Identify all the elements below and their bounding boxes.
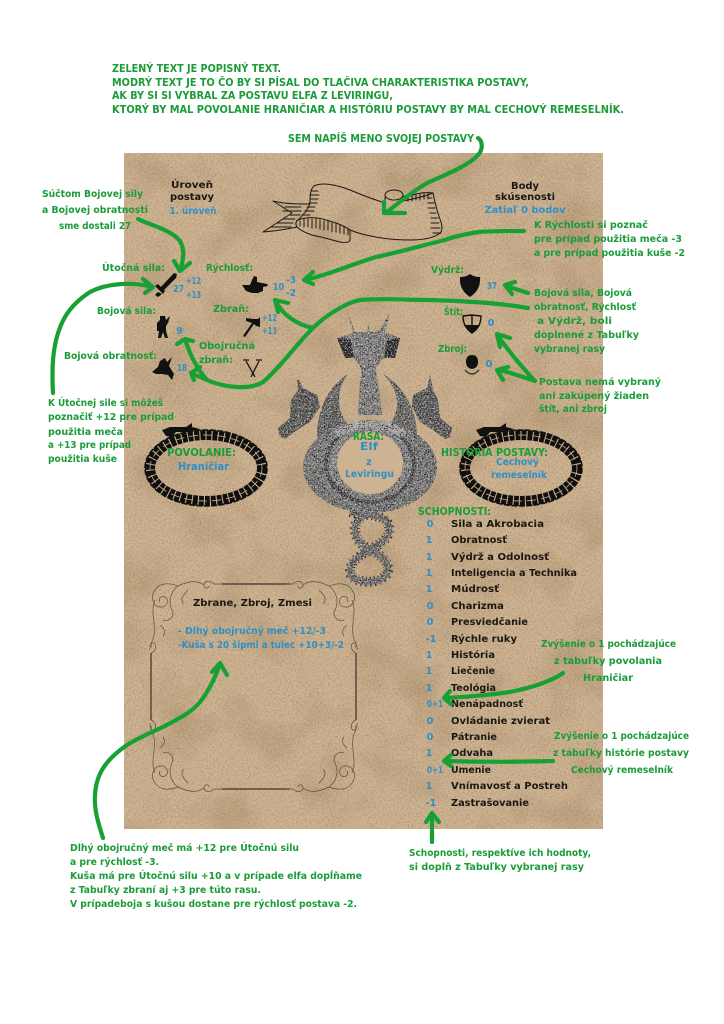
dragon body ring — [303, 421, 437, 513]
callout: ranger bonus: Zvýšenie o 1 pochádzajúce — [541, 638, 676, 650]
callout: weapon explanation — [70, 841, 362, 910]
callout: guild craftsman bonus: z tabuľky histórie postavy — [553, 747, 690, 759]
ability values: 1 — [426, 584, 433, 595]
ability names: História — [451, 649, 495, 661]
ability values: 1 — [426, 748, 433, 759]
callout: weapon explanation: Kuša má pre Útočnú silu +10 a v prípade elfa dopĺňame — [70, 869, 362, 882]
callout: no shield or armor — [539, 376, 662, 415]
ability names: Múdrosť — [451, 583, 499, 595]
equipment list — [178, 625, 344, 651]
ability values: 0 — [427, 601, 434, 612]
arrow: speed note to speed — [304, 231, 524, 284]
intro text: KTORÝ BY MAL POVOLANIE HRANIČIAR A HISTÓRIU POSTAVY BY MAL CECHOVÝ REMESELNÍK. — [112, 103, 624, 116]
ability values: 1 — [426, 535, 433, 546]
dragon centre head — [337, 312, 400, 415]
callout: speed note: K Rýchlosti si poznač — [534, 219, 648, 231]
stat: weapon: Zbraň: — [213, 303, 249, 315]
ability names: Umenie — [451, 765, 491, 776]
heading: experience points: skúsenosti — [495, 191, 555, 203]
arrow: weapon explanation to equipment — [95, 663, 227, 838]
stat: weapon — [213, 303, 277, 337]
stat: shield — [444, 305, 495, 333]
stat: endurance — [431, 264, 497, 297]
stat: armor: 0 — [486, 359, 493, 370]
callout: abilities from race table: Schopnosti, respektíve ich hodnoty, — [409, 847, 591, 859]
callout: no shield or armor: ani zakúpený žiaden — [539, 390, 649, 402]
stat: combat strength — [97, 305, 183, 338]
callout: speed note: pre prípad použitia meča -3 — [534, 233, 682, 245]
heading: level: postavy — [170, 192, 215, 203]
panel: weapons, armor, equipment frame — [150, 581, 357, 792]
ability values: 0 — [427, 732, 434, 743]
callout: weapon explanation: z Tabuľky zbraní aj +3 pre túto rasu. — [70, 884, 261, 896]
stat: endurance: 37 — [487, 281, 497, 292]
arrow: sum to attack power — [138, 219, 190, 271]
heading: level — [170, 178, 217, 217]
stat: speed: 10 — [273, 282, 284, 293]
ability names: Obratnosť — [451, 534, 507, 546]
dragon left head — [278, 377, 320, 439]
arrow: ranger bonus — [444, 673, 563, 704]
equipment list: -Kuša s 20 šípmi a tulec +10+3/-2 — [178, 639, 344, 651]
stat: two-handed weapon: Obojručná — [199, 340, 255, 352]
arrow: name to banner — [384, 138, 482, 213]
callout: abilities from race table: si doplň z Tabuľky vybranej rasy — [409, 861, 585, 873]
stat: combat agility — [64, 350, 187, 380]
icon: three-headed dragon — [278, 312, 452, 582]
ability values: 1 — [426, 650, 433, 661]
ability names: Inteligencia a Technika — [451, 568, 577, 579]
ability names: Pátranie — [451, 731, 497, 743]
ability values: 1 — [426, 568, 433, 579]
stat: speed: -2 — [286, 288, 296, 299]
panel: parchment character sheet — [124, 153, 603, 829]
callout: sum of combat stats: a Bojovej obratnosti — [42, 205, 148, 216]
stat: combat agility: Bojová obratnosť: — [64, 350, 157, 362]
callout: speed note — [534, 219, 685, 259]
callout: race stats note — [534, 287, 640, 355]
panel: character history: remeselník — [491, 469, 547, 481]
ability values: 0+1 — [427, 765, 443, 776]
ability names: Liečenie — [451, 665, 495, 677]
panel: profession — [167, 446, 236, 473]
stat: attack power: Útočná sila: — [102, 261, 165, 274]
stat: two-handed weapon: zbraň: — [199, 354, 233, 366]
panel: abilities list — [418, 505, 577, 809]
ability names: Vnímavosť a Postreh — [451, 780, 568, 792]
callout: guild craftsman bonus — [553, 730, 690, 776]
dragon ring opening — [337, 432, 403, 494]
ability names: Zastrašovanie — [451, 797, 529, 809]
callout: ranger bonus: z tabuľky povolania — [554, 656, 662, 667]
stat: speed: -3 — [286, 275, 296, 286]
callout: guild craftsman bonus: Cechový remeselník — [571, 764, 673, 776]
stat: shield: Štít: — [444, 305, 463, 318]
stat: combat strength: 9 — [176, 326, 183, 337]
ability names: Teológia — [451, 682, 496, 694]
arrow: race stats branching to stats — [177, 299, 528, 387]
panel: profession: POVOLANIE: — [167, 446, 236, 459]
panel: race: Leviringu — [345, 469, 394, 480]
ability values: 1 — [426, 781, 433, 792]
panel: race: RASA: — [353, 430, 384, 443]
callout: race stats note: doplnené z Tabuľky — [534, 329, 640, 341]
stat: attack power: 27 — [173, 284, 184, 295]
panel: race: Elf — [360, 440, 378, 453]
callout: race stats note: a Výdrž, boli — [537, 315, 612, 327]
stat: combat strength: Bojová sila: — [97, 305, 156, 317]
ability values: 1 — [426, 666, 433, 677]
callout: attack power note: K Útočnej sile si môžeš — [48, 396, 163, 409]
ability names: Presviedčanie — [451, 616, 528, 628]
callout: weapon explanation: a pre rýchlosť -3. — [70, 856, 159, 868]
callout: ranger bonus — [541, 638, 676, 684]
callout: no shield or armor: štít, ani zbroj — [539, 403, 607, 415]
stat: speed — [206, 262, 296, 299]
callout: race stats note: Bojová sila, Bojová — [534, 287, 632, 299]
ornamental frame — [150, 581, 357, 792]
ability values: 0+1 — [427, 699, 443, 710]
arrow: to shield and armor values — [497, 334, 535, 381]
ability names: Výdrž a Odolnosť — [451, 551, 549, 563]
ability values — [426, 519, 443, 809]
panel: character history: Cechový — [496, 456, 540, 468]
intro text: AK BY SI SI VYBRAL ZA POSTAVU ELFA Z LEVIRINGU, — [112, 89, 393, 102]
arrow: attack note to attack power — [52, 279, 153, 393]
arrow: guild craftsman bonus — [444, 755, 553, 766]
callout: speed note: a pre prípad použitia kuše -2 — [534, 247, 685, 259]
ability values: -1 — [426, 798, 437, 809]
stat: weapon: +12 — [262, 313, 277, 324]
heading: experience points — [484, 181, 566, 216]
ability names — [451, 519, 577, 809]
stat: shield: 0 — [488, 318, 495, 329]
panel: character history — [441, 446, 548, 481]
intro text: MODRÝ TEXT JE TO ČO BY SI PÍSAL DO TLAČIVA CHARAKTERISTIKA POSTAVY, — [112, 76, 529, 89]
stat: attack power: +12 — [186, 276, 201, 287]
callout: attack power note: použitia kuše — [48, 453, 117, 465]
stat: armor: Zbroj: — [438, 344, 467, 355]
panel: race: z — [366, 457, 372, 468]
callout: attack power note: a +13 pre prípad — [48, 439, 131, 451]
dragon wings — [317, 374, 417, 437]
stat: attack power — [102, 261, 201, 301]
callout: abilities from race table — [409, 847, 591, 873]
stat: weapon: +13 — [262, 326, 277, 337]
stat: endurance: Výdrž: — [431, 264, 464, 276]
callout: attack power note: poznačiť +12 pre prípad — [48, 411, 174, 423]
icon: left ouroboros — [145, 423, 267, 506]
ability values: 1 — [426, 683, 433, 694]
ability names: Ovládanie zvierat — [451, 715, 550, 727]
stat: attack power: +13 — [186, 290, 201, 301]
icon: right ouroboros — [460, 423, 582, 506]
panel: profession: Hraničiar — [178, 460, 230, 473]
callout: ranger bonus: Hraničiar — [583, 672, 633, 684]
callout: race stats note: obratnosť, Rýchlosť — [534, 301, 636, 313]
callout: sum of combat stats: sme dostali 27 — [59, 221, 131, 232]
intro text — [112, 62, 624, 116]
dragon right head — [412, 375, 452, 439]
heading: experience points: Zatiaľ 0 bodov — [484, 205, 566, 216]
callout: sum of combat stats — [42, 188, 148, 232]
arrow: to endurance — [505, 282, 528, 294]
callout: guild craftsman bonus: Zvýšenie o 1 pochádzajúce — [554, 730, 689, 742]
callout: weapon explanation: Dlhý obojručný meč má +12 pre Útočnú silu — [70, 841, 299, 854]
ability names: Nenápadnosť — [451, 698, 523, 710]
stat: combat agility: 18 — [177, 363, 187, 374]
callout: attack power note: použitia meča — [48, 426, 123, 438]
ability values: 0 — [427, 519, 434, 530]
heading: name prompt: SEM NAPÍŠ MENO SVOJEJ POSTAVY — [288, 132, 475, 145]
callout: attack power note — [48, 396, 174, 465]
panel: character history: HISTÓRIA POSTAVY: — [441, 446, 548, 459]
heading: experience points: Body — [511, 181, 540, 192]
stat: speed: Rýchlosť: — [206, 262, 253, 274]
stat: armor — [438, 344, 493, 374]
heading: abilities: SCHOPNOSTI: — [418, 505, 491, 518]
callout: sum of combat stats: Súčtom Bojovej sily — [42, 188, 144, 200]
ability names: Charizma — [451, 601, 504, 612]
heading: level: 1. úroveň — [170, 205, 217, 217]
callout: no shield or armor: Postava nemá vybraný — [539, 376, 662, 388]
ability names: Rýchle ruky — [451, 633, 518, 645]
ability values: -1 — [426, 634, 437, 645]
ability values: 0 — [427, 716, 434, 727]
dragon tail loops — [350, 512, 389, 582]
intro text: ZELENÝ TEXT JE POPISNÝ TEXT. — [112, 62, 281, 75]
ability values: 0 — [427, 617, 434, 628]
arrow: abilities note — [426, 813, 439, 842]
callout: race stats note: vybranej rasy — [534, 344, 606, 355]
stat: two-handed weapon — [199, 340, 262, 377]
callout: weapon explanation: V prípadeboja s kušou dostane pre rýchlosť postava -2. — [70, 898, 357, 910]
ability names: Sila a Akrobacia — [451, 519, 544, 530]
equipment list: - Dlhý obojručný meč +12/-3 — [178, 625, 326, 637]
ability names: Odvaha — [451, 748, 493, 759]
heading: level: Úroveň — [171, 178, 213, 191]
ability values: 1 — [426, 552, 433, 563]
panel: race — [345, 430, 394, 480]
frame heading: Zbrane, Zbroj, Zmesi — [193, 598, 312, 609]
icon: name scroll banner — [263, 184, 442, 243]
